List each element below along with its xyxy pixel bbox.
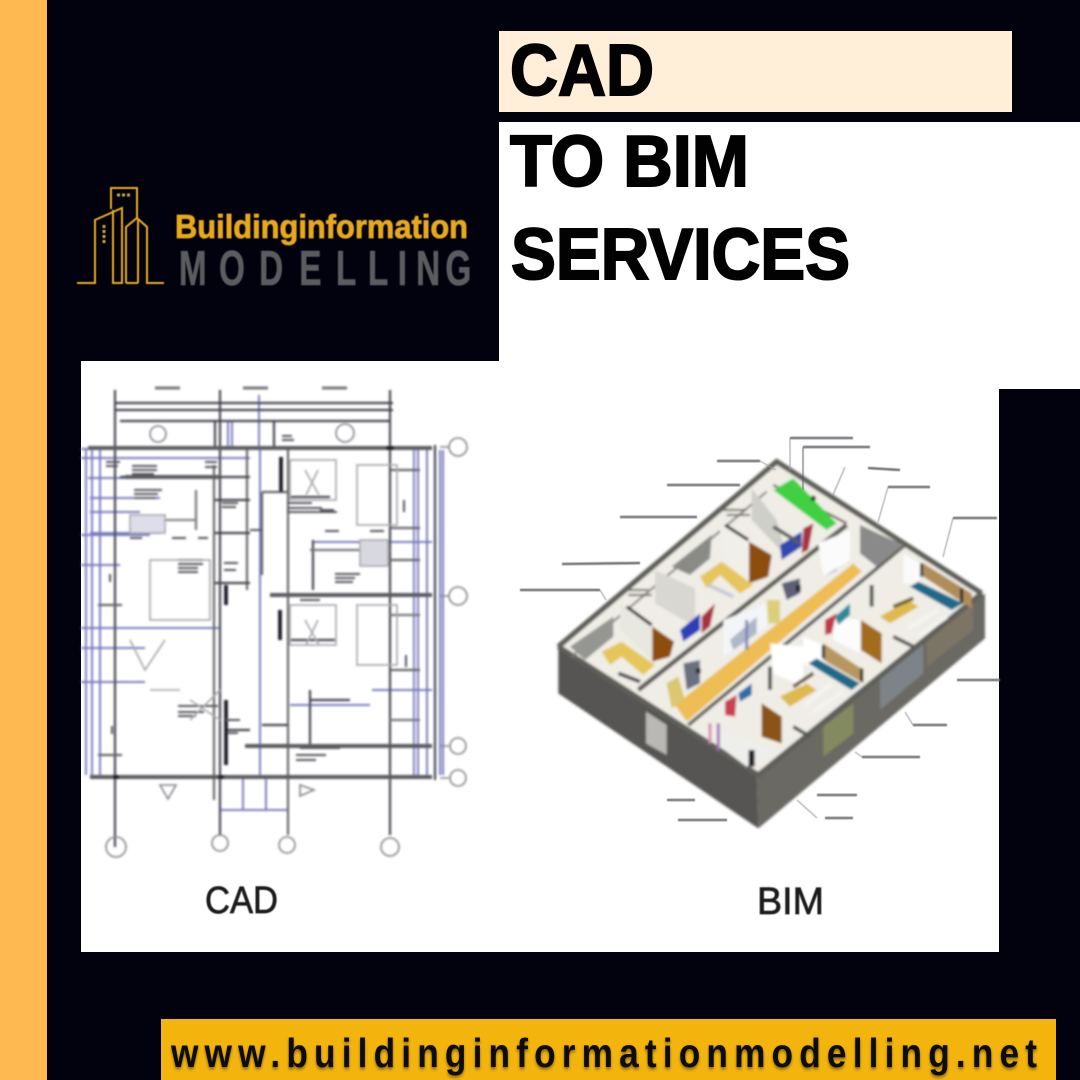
green zone	[773, 478, 837, 530]
dimension labels	[155, 386, 347, 390]
logo word: Buildinginformation: Buildinginformation	[175, 208, 468, 245]
floor	[558, 462, 982, 775]
fixtures	[130, 460, 397, 720]
title: SERVICES: SERVICES	[511, 215, 850, 295]
corridor details	[723, 603, 767, 657]
white wall panels	[752, 488, 787, 557]
logo: Buildinginformation Modelling	[77, 188, 471, 296]
website banner: www.buildinginformationmodelling.net	[170, 1031, 1037, 1077]
blue plan lines	[81, 395, 443, 810]
title: TO BIM: TO BIM	[510, 122, 749, 202]
wall tint patches	[880, 640, 923, 710]
left accent strip	[0, 0, 47, 1080]
stair hatch	[625, 510, 750, 595]
logo word: MODELLING: MODELLING	[179, 241, 471, 296]
room hatching blocks	[106, 436, 406, 760]
brown doors	[749, 542, 772, 583]
white stripes fixtures	[805, 610, 947, 712]
grid bubbles	[106, 424, 467, 857]
central dividers	[638, 525, 905, 725]
image label: CAD: CAD	[205, 880, 278, 922]
dark accents	[627, 525, 962, 767]
teal equipment	[910, 582, 963, 610]
white title panel	[499, 122, 1080, 389]
callout label text stubs	[520, 438, 1000, 820]
title banner: CAD	[499, 31, 1012, 112]
title banner: CAD: CAD	[510, 31, 654, 111]
right exterior wall	[757, 593, 985, 828]
pink and blue pipes	[710, 620, 747, 750]
tan back walls	[923, 563, 972, 608]
panel: CAD vs BIM image	[81, 361, 1000, 952]
dark plan lines	[98, 390, 435, 847]
door on wall	[646, 712, 667, 755]
corridor yellow duct	[675, 563, 862, 722]
icon: city buildings	[77, 188, 164, 283]
outer wall tops	[558, 462, 982, 775]
CAD floor plan drawing	[81, 388, 467, 857]
BIM isometric model	[558, 462, 985, 828]
heavy walls	[88, 448, 432, 777]
left exterior wall	[558, 647, 758, 828]
blue and red MEP	[680, 613, 700, 642]
BIM callout labels	[520, 438, 1000, 820]
yellow furniture	[700, 562, 753, 593]
multi-colour clutter	[618, 527, 913, 737]
image label: BIM: BIM	[757, 881, 824, 923]
